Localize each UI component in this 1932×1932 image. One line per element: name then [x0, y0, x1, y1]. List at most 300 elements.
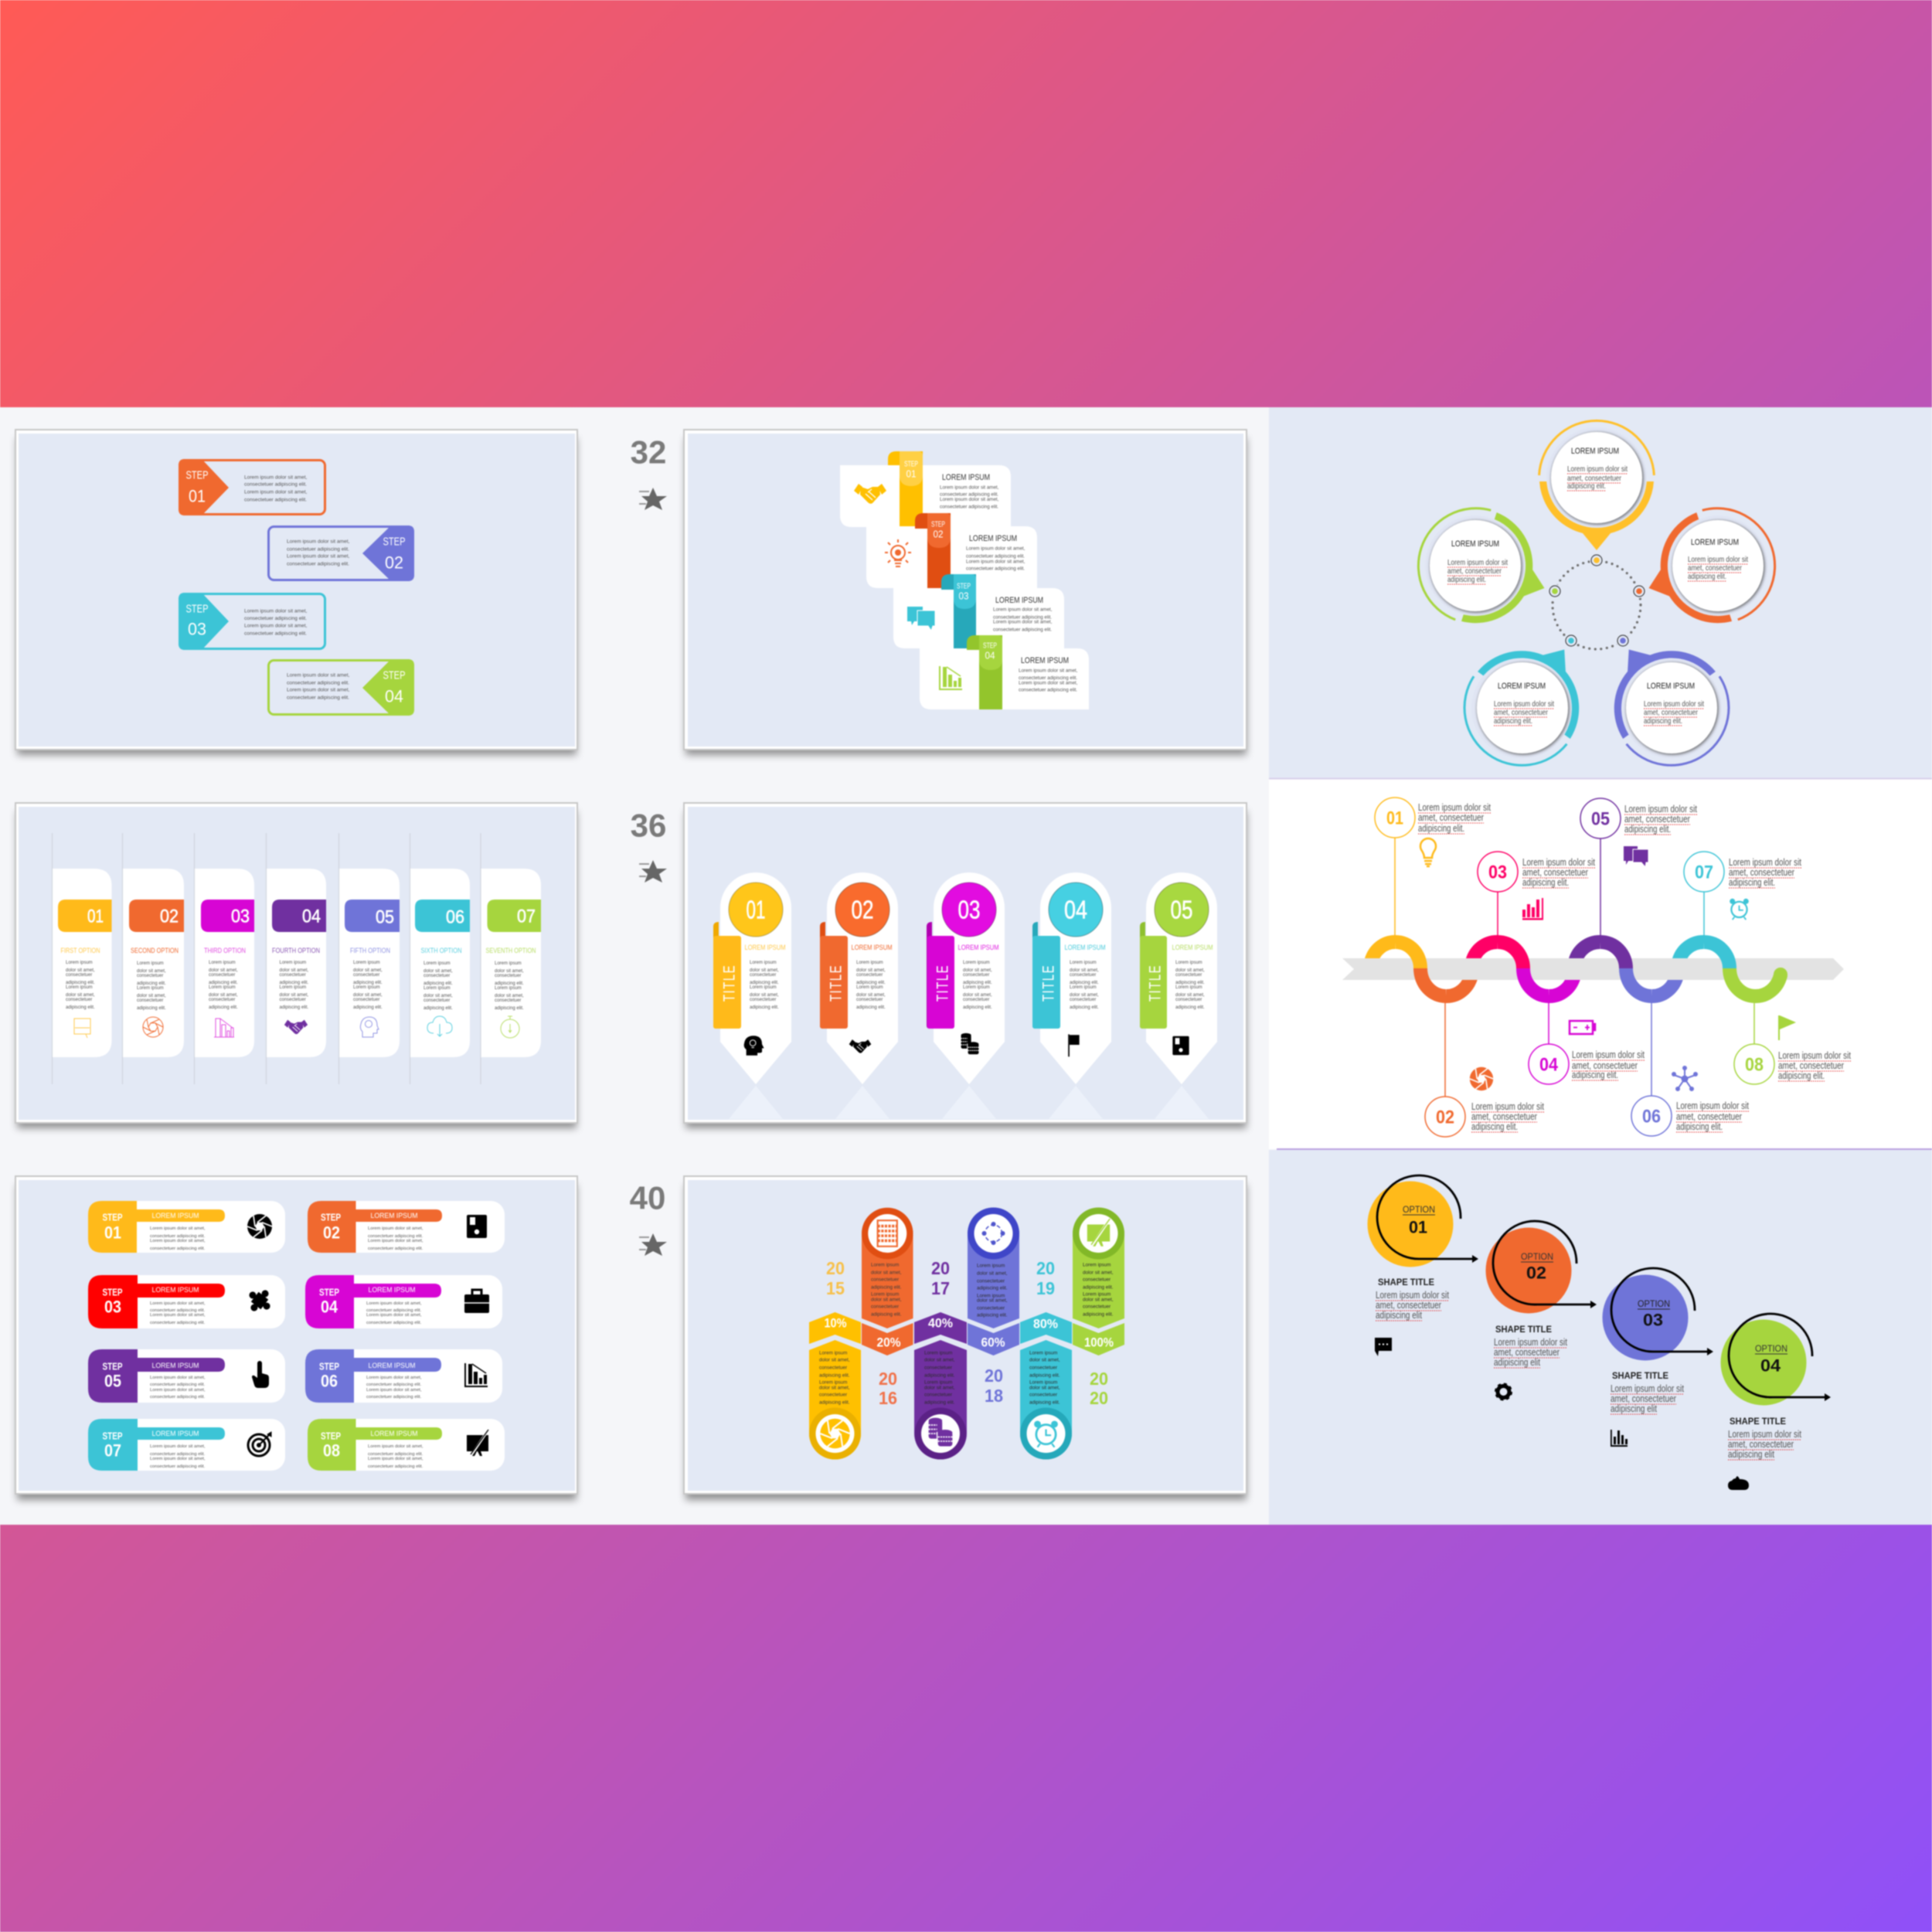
column 2019 teal: adipiscing elit. — [1029, 1372, 1060, 1379]
card step 05: consectetuer adipiscing elit. — [150, 1383, 206, 1387]
step 02 box: consectetuer adipiscing elit. — [287, 547, 349, 552]
column 2016 orange: dolor sit amet, — [871, 1297, 902, 1303]
milestone 05 — [1580, 798, 1697, 935]
step 03 box: 03 — [188, 620, 206, 638]
column 2017 purple: Lorem ipsum — [924, 1351, 952, 1355]
card step 07: LOREM IPSUM — [151, 1430, 199, 1437]
column 2016 orange: adipiscing elit. — [871, 1312, 902, 1317]
card 04: 04 — [302, 906, 321, 927]
card 07: dolor sit amet, — [495, 994, 524, 998]
card step 01 — [88, 1201, 285, 1253]
milestone 04: adipiscing elit. — [1572, 1070, 1618, 1080]
column 2018 periwinkle: consectetuer — [977, 1278, 1005, 1284]
step 01 card: consectetuer adipiscing elit. — [940, 492, 998, 498]
pin 03 — [927, 872, 1005, 1119]
column 2015 yellow: adipiscing elit. — [819, 1372, 850, 1379]
card 03 — [195, 869, 254, 1057]
pin 02: adipiscing elit. — [856, 1005, 886, 1010]
card step 01: 01 — [104, 1223, 121, 1243]
option 04: 04 — [1760, 1355, 1781, 1376]
column 2015 yellow: Lorem ipsum — [819, 1351, 847, 1355]
milestone 07: adipiscing elit. — [1729, 877, 1775, 888]
circle right orange: Lorem ipsum dolor sit — [1688, 555, 1748, 564]
milestone 04: amet, consectetuer — [1572, 1060, 1638, 1071]
step 04 box — [269, 659, 414, 716]
column 2017 purple: consectetuer — [924, 1365, 952, 1371]
pin 05: TITLE — [1145, 964, 1164, 1002]
circle right orange: amet, consectetuer — [1688, 563, 1742, 573]
icon: chat — [1624, 846, 1648, 867]
circle top yellow: amet, consectetuer — [1567, 474, 1621, 483]
option 01: amet, consectetuer — [1376, 1300, 1441, 1311]
pin 03: consectetuer — [963, 998, 989, 1002]
icon: star — [639, 860, 667, 883]
option 04: amet, consectetuer — [1728, 1439, 1794, 1450]
column 2017 purple — [914, 1312, 967, 1459]
card step 07: Lorem ipsum dolor sit amet, — [150, 1457, 206, 1461]
pin 05: adipiscing elit. — [1175, 981, 1205, 985]
year labels: 20 — [931, 1258, 950, 1278]
circle left green: adipiscing elit. — [1447, 575, 1486, 584]
column 2018 periwinkle — [968, 1207, 1019, 1355]
pin 03: adipiscing elit. — [963, 1005, 992, 1010]
pin 02: LOREM IPSUM — [852, 944, 892, 951]
card step 04: Lorem ipsum dolor sit amet, — [366, 1301, 422, 1306]
milestone 04: 04 — [1539, 1054, 1559, 1076]
card step 02: 02 — [323, 1223, 340, 1243]
panel: slide 3 five circles — [1269, 407, 1932, 788]
column 2018 periwinkle: consectetuer — [977, 1306, 1005, 1311]
card step 05: consectetuer adipiscing elit. — [150, 1395, 206, 1400]
pin 04: LOREM IPSUM — [1065, 944, 1105, 951]
icon: flag — [1778, 1015, 1796, 1040]
milestone 05: amet, consectetuer — [1624, 814, 1690, 825]
pin 05: 05 — [1170, 895, 1193, 924]
pin 03: dolor sit amet, — [963, 993, 992, 998]
option 03 — [1603, 1268, 1713, 1447]
column 2016 orange: dolor sit amet, — [871, 1270, 902, 1275]
column 2019 teal — [1020, 1312, 1072, 1459]
panel: slide 1 four step boxes — [15, 430, 577, 755]
pin 02: Lorem ipsum — [856, 985, 883, 990]
step 02 card: 02 — [934, 529, 943, 539]
pin 01: TITLE — [719, 964, 738, 1002]
pin 04: adipiscing elit. — [1070, 981, 1099, 985]
milestone 07: 07 — [1695, 862, 1713, 883]
card step 03: Lorem ipsum dolor sit amet, — [150, 1313, 206, 1318]
pin 05: dolor sit amet, — [1175, 993, 1205, 998]
card step 05: LOREM IPSUM — [151, 1362, 199, 1369]
card 01: dolor sit amet, — [66, 993, 95, 998]
column 2015 yellow: Lorem ipsum — [819, 1380, 847, 1385]
card 03: dolor sit amet, — [209, 993, 238, 998]
card 06: adipiscing elit. — [423, 981, 453, 986]
icon: star — [639, 1233, 667, 1256]
column 2019 teal: consectetuer — [1029, 1393, 1057, 1397]
card 01 — [53, 869, 111, 1057]
option 04: SHAPE TITLE — [1730, 1416, 1786, 1427]
circle top yellow: adipiscing elit. — [1567, 481, 1606, 491]
card 05: Lorem ipsum — [353, 985, 380, 990]
card 06 — [410, 869, 470, 1057]
column 2017 purple: consectetuer — [924, 1393, 952, 1397]
pin 05 — [1140, 872, 1217, 1119]
card step 05: Lorem ipsum dolor sit amet, — [150, 1388, 206, 1393]
circle bottom left teal: amet, consectetuer — [1494, 708, 1548, 717]
step 03 box: consectetuer adipiscing elit. — [244, 631, 307, 637]
step 04 card: Lorem ipsum dolor sit amet, — [1019, 668, 1078, 674]
circle top yellow: Lorem ipsum dolor sit — [1567, 464, 1628, 474]
card 07: consectetuer — [495, 998, 521, 1003]
card step 02: Lorem ipsum dolor sit amet, — [368, 1239, 423, 1243]
column 2020 green: dolor sit amet, — [1083, 1270, 1114, 1275]
column 2018 periwinkle: adipiscing elit. — [977, 1312, 1008, 1318]
step 03 card: STEP — [957, 583, 971, 590]
card 02: Lorem ipsum — [137, 961, 164, 966]
card step 08 — [308, 1419, 505, 1471]
card 05: consectetuer — [353, 973, 379, 978]
column 2015 yellow — [809, 1312, 861, 1459]
circle bottom right purple: adipiscing elit. — [1644, 716, 1682, 726]
column 2019 teal: adipiscing elit. — [1029, 1400, 1060, 1405]
milestone 04: Lorem ipsum dolor sit — [1572, 1049, 1645, 1060]
milestone 01 — [1375, 798, 1491, 935]
card step 04: LOREM IPSUM — [368, 1286, 416, 1294]
milestone 03: adipiscing elit. — [1522, 877, 1569, 888]
step 01 box: 01 — [189, 487, 206, 505]
column 2016 orange: consectetuer — [871, 1277, 899, 1283]
option 03: SHAPE TITLE — [1612, 1370, 1668, 1381]
card step 02: LOREM IPSUM — [371, 1212, 417, 1219]
circle bottom left teal: Lorem ipsum dolor sit — [1494, 699, 1554, 709]
circle bottom left teal — [1442, 616, 1611, 788]
card step 04: consectetuer adipiscing elit. — [366, 1308, 422, 1313]
wave rear segments — [1371, 942, 1704, 996]
card step 06: STEP — [319, 1360, 339, 1372]
option 04 — [1720, 1314, 1831, 1490]
card 03: THIRD OPTION — [204, 947, 246, 954]
year labels: 16 — [879, 1388, 897, 1408]
option 01: Lorem ipsum dolor sit — [1376, 1290, 1449, 1301]
card 03: 03 — [231, 906, 250, 927]
step 01 box — [179, 459, 325, 515]
column 2016 orange: 20% — [876, 1335, 901, 1349]
column 2020 green: adipiscing elit. — [1083, 1312, 1114, 1317]
card step 01: consectetuer adipiscing elit. — [150, 1234, 206, 1239]
card 06: SIXTH OPTION — [420, 947, 462, 954]
card 02: adipiscing elit. — [137, 981, 166, 986]
step 02 box: STEP — [383, 535, 405, 549]
icon: bars — [1611, 1430, 1628, 1447]
milestone 02: adipiscing elit. — [1471, 1121, 1518, 1132]
column 2015 yellow: 10% — [824, 1315, 847, 1331]
card 03: adipiscing elit. — [209, 1005, 238, 1010]
card 07: 07 — [517, 906, 536, 927]
column 2017 purple: dolor sit amet, — [924, 1357, 955, 1363]
option 02: Lorem ipsum dolor sit — [1494, 1337, 1567, 1348]
card step 08: consectetuer adipiscing elit. — [368, 1452, 423, 1457]
option 03: 03 — [1643, 1311, 1663, 1329]
step 02 card: Lorem ipsum dolor sit amet, — [966, 546, 1026, 552]
column 2019 teal: dolor sit amet, — [1029, 1385, 1060, 1391]
card step 06: 06 — [321, 1371, 338, 1391]
card 01: adipiscing elit. — [66, 981, 95, 985]
card 05: consectetuer — [353, 998, 379, 1002]
step 04 card: Lorem ipsum dolor sit amet, — [1019, 680, 1078, 686]
column 2018 periwinkle: adipiscing elit. — [977, 1286, 1008, 1291]
year labels: 20 — [879, 1369, 897, 1389]
column 2015 yellow: dolor sit amet, — [819, 1385, 850, 1391]
pin 03: dolor sit amet, — [963, 968, 992, 973]
card 05: adipiscing elit. — [353, 1005, 383, 1010]
option 04: Lorem ipsum dolor sit — [1728, 1429, 1801, 1440]
card 01: Lorem ipsum — [66, 961, 93, 965]
circle bottom right purple: Lorem ipsum dolor sit — [1644, 699, 1704, 709]
step 01 card: LOREM IPSUM — [942, 473, 990, 482]
option 03: adipiscing elit — [1611, 1403, 1657, 1414]
pin 04 — [1032, 872, 1111, 1119]
pin 01: consectetuer — [750, 973, 776, 978]
card step 07: consectetuer adipiscing elit. — [150, 1452, 206, 1457]
step 03 box: Lorem ipsum dolor sit amet, — [244, 623, 308, 629]
step 03 box — [179, 593, 325, 650]
step 01 card: Lorem ipsum dolor sit amet, — [940, 497, 999, 502]
icon: bars — [1522, 898, 1543, 920]
pin 02: consectetuer — [856, 998, 883, 1002]
column 2020 green: adipiscing elit. — [1083, 1284, 1114, 1291]
milestone 06: adipiscing elit. — [1676, 1121, 1723, 1132]
milestone 05: 05 — [1591, 808, 1610, 830]
step 04 card: consectetuer adipiscing elit. — [1019, 688, 1077, 692]
card 06: consectetuer — [423, 974, 450, 978]
milestone 07: amet, consectetuer — [1729, 867, 1794, 878]
card 04: Lorem ipsum — [280, 985, 306, 990]
panel: slide 9 option circles — [1269, 1150, 1932, 1525]
circle bottom right purple — [1583, 616, 1751, 788]
icon: gear — [1496, 1384, 1512, 1400]
card step 03: Lorem ipsum dolor sit amet, — [150, 1301, 206, 1306]
pin 02: dolor sit amet, — [856, 993, 886, 998]
pin 04: consectetuer — [1070, 998, 1096, 1002]
step 03 card: consectetuer adipiscing elit. — [993, 615, 1052, 620]
icon: chat dots — [1375, 1338, 1392, 1356]
milestone 01: Lorem ipsum dolor sit — [1418, 802, 1491, 813]
column 2015 yellow: adipiscing elit. — [819, 1400, 850, 1405]
milestone 03: 03 — [1488, 862, 1507, 883]
pin 01 — [713, 872, 791, 1119]
card 03: dolor sit amet, — [209, 968, 238, 973]
column 2020 green: Lorem ipsum — [1083, 1292, 1111, 1297]
milestone 06: Lorem ipsum dolor sit — [1676, 1100, 1749, 1111]
card 07: consectetuer — [495, 974, 521, 978]
card 02: consectetuer — [137, 974, 163, 978]
pin 05: LOREM IPSUM — [1172, 944, 1213, 951]
step 04 box: Lorem ipsum dolor sit amet, — [287, 688, 350, 692]
column 2020 green: consectetuer — [1083, 1277, 1111, 1283]
column 2015 yellow: dolor sit amet, — [819, 1357, 850, 1363]
year labels: 18 — [985, 1386, 1003, 1406]
card 03: consectetuer — [209, 998, 235, 1002]
icon: star — [639, 488, 667, 510]
circle left green: amet, consectetuer — [1447, 566, 1502, 576]
column 2018 periwinkle: Lorem ipsum — [977, 1294, 1005, 1298]
card 03: Lorem ipsum — [209, 985, 236, 990]
year labels: 19 — [1036, 1278, 1055, 1298]
number 40: 40 — [630, 1179, 665, 1216]
option 01: SHAPE TITLE — [1378, 1277, 1434, 1287]
card step 03: consectetuer adipiscing elit. — [150, 1308, 206, 1313]
card 02 — [123, 869, 184, 1057]
milestone 05: Lorem ipsum dolor sit — [1624, 804, 1697, 815]
card step 06: LOREM IPSUM — [368, 1362, 416, 1369]
card step 02: STEP — [321, 1212, 341, 1223]
pin 05: adipiscing elit. — [1175, 1005, 1205, 1010]
card 06: adipiscing elit. — [423, 1006, 453, 1011]
year labels: 20 — [985, 1366, 1003, 1386]
year labels: 20 — [1036, 1258, 1055, 1278]
milestone 06 — [1631, 1003, 1749, 1136]
step 03 card — [893, 574, 1064, 648]
milestone 05: adipiscing elit. — [1624, 824, 1671, 835]
card 07: adipiscing elit. — [495, 981, 524, 986]
card 06: consectetuer — [423, 998, 450, 1003]
option 01: 01 — [1409, 1218, 1427, 1236]
step 04 card — [920, 635, 1089, 709]
option 01: OPTION — [1403, 1204, 1435, 1215]
card step 06: Lorem ipsum dolor sit amet, — [366, 1376, 422, 1380]
column 2016 orange: consectetuer — [871, 1304, 899, 1309]
pin 02: TITLE — [826, 964, 845, 1002]
card 02: adipiscing elit. — [137, 1006, 166, 1011]
card 01: adipiscing elit. — [66, 1005, 95, 1010]
card step 07: STEP — [102, 1430, 123, 1442]
card 05: dolor sit amet, — [353, 968, 383, 973]
milestone 04 — [1529, 1003, 1645, 1084]
card step 05: STEP — [102, 1360, 123, 1372]
step 04 box: STEP — [383, 669, 405, 682]
step 01 box: consectetuer adipiscing elit. — [244, 498, 307, 502]
card 03: consectetuer — [209, 973, 235, 978]
card step 06: Lorem ipsum dolor sit amet, — [366, 1388, 422, 1393]
card step 01: LOREM IPSUM — [151, 1212, 199, 1219]
card step 07: Lorem ipsum dolor sit amet, — [150, 1444, 206, 1449]
column 2018 periwinkle: Lorem ipsum — [977, 1263, 1005, 1269]
circle bottom right purple: LOREM IPSUM — [1647, 682, 1695, 691]
icon: speech bubbles — [907, 607, 935, 631]
milestone 02 — [1425, 1003, 1544, 1137]
card step 05: 05 — [104, 1371, 121, 1391]
icon: lightbulb gear — [885, 539, 911, 566]
step 01 box: consectetuer adipiscing elit. — [244, 482, 307, 487]
milestone 06: amet, consectetuer — [1676, 1111, 1742, 1122]
card step 08: 08 — [323, 1440, 340, 1461]
pin 01: dolor sit amet, — [750, 993, 779, 998]
pin 03: LOREM IPSUM — [958, 944, 998, 951]
step 01 card: 01 — [906, 468, 917, 479]
panel: slide 8 zigzag years — [684, 1176, 1247, 1500]
pin 03: 03 — [958, 895, 980, 924]
option 02: amet, consectetuer — [1494, 1347, 1560, 1358]
column 2020 green: dolor sit amet, — [1083, 1297, 1114, 1303]
option 03: amet, consectetuer — [1611, 1393, 1676, 1404]
card 04: FOURTH OPTION — [272, 947, 320, 954]
pin 05: dolor sit amet, — [1175, 968, 1205, 973]
pin 01: LOREM IPSUM — [745, 944, 785, 951]
year labels: 15 — [826, 1278, 845, 1298]
step 02 card: Lorem ipsum dolor sit amet, — [966, 560, 1026, 564]
step 03 card: Lorem ipsum dolor sit amet, — [993, 620, 1053, 624]
card step 05: Lorem ipsum dolor sit amet, — [150, 1376, 206, 1380]
card 02: dolor sit amet, — [137, 994, 166, 998]
pin 01: dolor sit amet, — [750, 968, 779, 973]
card step 01: STEP — [102, 1212, 123, 1223]
icon: aperture — [1470, 1067, 1493, 1090]
pin 01: consectetuer — [750, 998, 776, 1002]
card step 02: Lorem ipsum dolor sit amet, — [368, 1226, 423, 1231]
step 01 box: STEP — [185, 468, 209, 482]
option 02 — [1485, 1221, 1597, 1400]
column 2018 periwinkle: 60% — [981, 1335, 1005, 1349]
icon: cloud — [1728, 1476, 1749, 1490]
pin 04: 04 — [1064, 895, 1087, 924]
column 2015 yellow: consectetuer — [819, 1393, 847, 1397]
pin 02: dolor sit amet, — [856, 968, 886, 973]
card step 03: consectetuer adipiscing elit. — [150, 1321, 206, 1325]
step 04 card: LOREM IPSUM — [1021, 656, 1069, 665]
card step 04: 04 — [321, 1297, 338, 1317]
pin 05: consectetuer — [1175, 973, 1202, 978]
step 01 card: STEP — [904, 461, 918, 468]
card step 02: consectetuer adipiscing elit. — [368, 1247, 423, 1251]
card step 03 — [88, 1275, 285, 1328]
column 2016 orange: Lorem ipsum — [871, 1292, 899, 1297]
option 04: OPTION — [1755, 1343, 1787, 1354]
pin 04: Lorem ipsum — [1070, 985, 1097, 990]
pin 03: consectetuer — [963, 973, 989, 978]
milestone 01: 01 — [1386, 808, 1403, 828]
number 32: 32 — [631, 434, 666, 470]
year labels: 20 — [1090, 1369, 1108, 1389]
card 04: consectetuer — [280, 973, 306, 978]
card step 08: consectetuer adipiscing elit. — [368, 1464, 423, 1469]
step 04 card: STEP — [983, 641, 997, 651]
pin 02: consectetuer — [856, 973, 883, 978]
pin 01: adipiscing elit. — [750, 1005, 779, 1010]
card 02: 02 — [160, 906, 179, 927]
circle top yellow — [1539, 420, 1654, 567]
milestone 03: amet, consectetuer — [1522, 867, 1588, 878]
option 02: OPTION — [1521, 1251, 1553, 1262]
card step 04: consectetuer adipiscing elit. — [366, 1321, 422, 1325]
pin 05: consectetuer — [1175, 998, 1202, 1002]
milestone 07: Lorem ipsum dolor sit — [1729, 857, 1801, 868]
pin 04: dolor sit amet, — [1070, 968, 1099, 973]
option 02: SHAPE TITLE — [1495, 1324, 1552, 1335]
card 05: adipiscing elit. — [353, 981, 383, 985]
step 03 card: LOREM IPSUM — [995, 596, 1043, 605]
option 01 — [1368, 1175, 1478, 1356]
card 05: 05 — [376, 907, 394, 927]
step 03 card: 03 — [958, 590, 969, 601]
year labels: 20 — [1090, 1388, 1108, 1408]
pin 02: adipiscing elit. — [856, 981, 886, 985]
card step 06 — [305, 1349, 502, 1403]
pin 05: Lorem ipsum — [1175, 985, 1202, 990]
step 03 box: STEP — [185, 603, 209, 615]
card 04: adipiscing elit. — [280, 1005, 309, 1010]
step 04 box: consectetuer adipiscing elit. — [287, 696, 349, 700]
milestone 08: 08 — [1745, 1054, 1764, 1076]
